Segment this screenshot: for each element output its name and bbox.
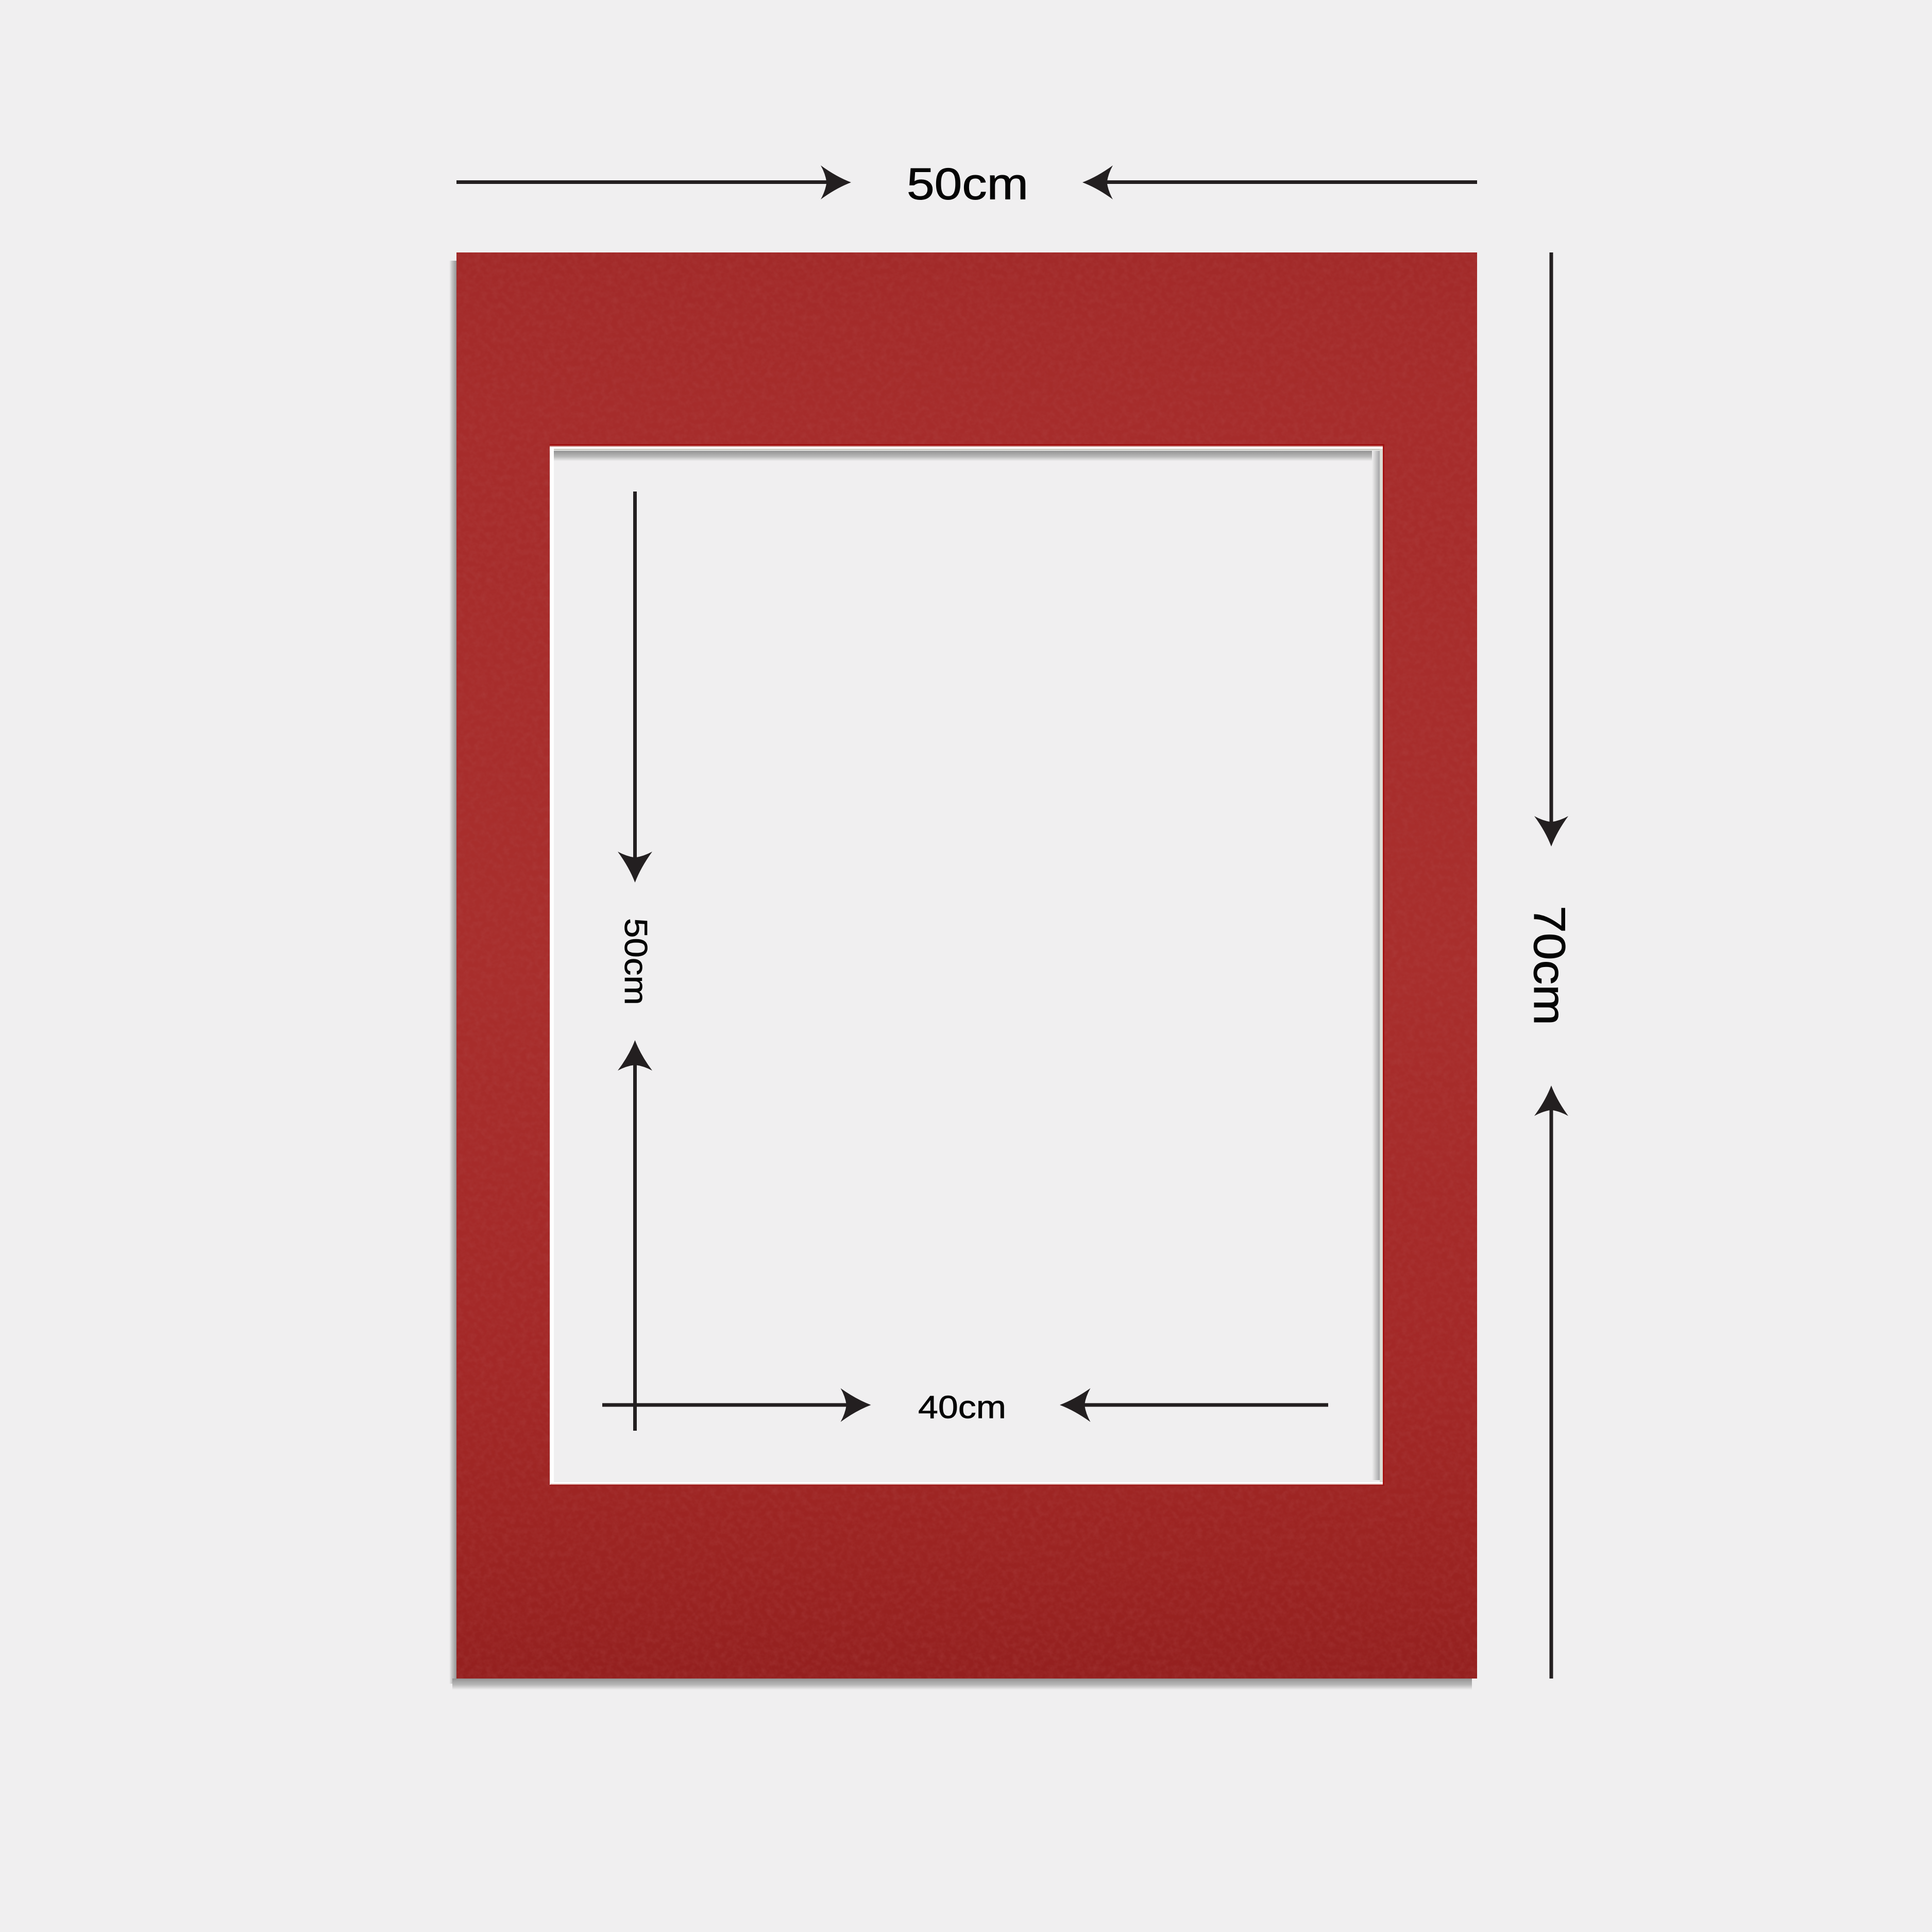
arrow: top dimension right	[1082, 165, 1477, 199]
arrow: right dimension up	[1534, 1086, 1568, 1679]
mat board texture	[456, 252, 1477, 1679]
label: inner width 40cm: 40cm	[918, 1390, 1006, 1425]
panel: red mat board with window	[456, 252, 1477, 1679]
arrow: right dimension down	[1534, 252, 1568, 846]
arrow: inner width left	[1060, 1388, 1328, 1422]
label: right height 70cm: 70cm	[1524, 906, 1574, 1025]
arrow: inner width right	[602, 1388, 871, 1422]
arrow: inner height up	[618, 1040, 652, 1431]
mat board surface	[456, 252, 1477, 1679]
arrow: inner height down	[618, 492, 652, 883]
mat board drop shadow	[449, 261, 1472, 1690]
window opening	[550, 444, 1384, 1486]
arrow: top dimension left	[456, 165, 851, 199]
label: top width 50cm: 50cm	[907, 160, 1028, 209]
label: inner height 50cm: 50cm	[618, 918, 653, 1005]
